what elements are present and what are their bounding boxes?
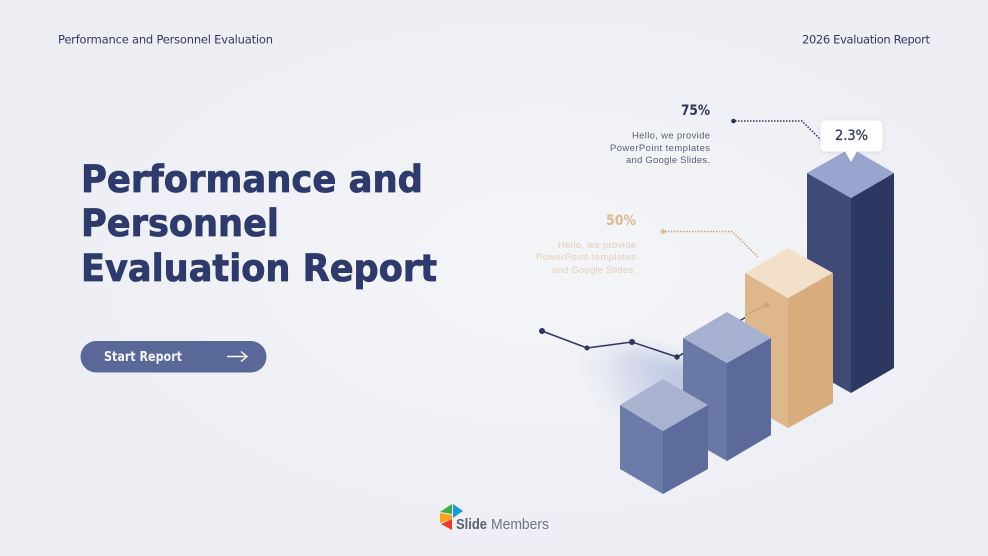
callout: 50% text: Hello, we provide [558,240,636,251]
icon: arrow [227,352,247,362]
shadow glow under line [565,345,700,460]
bar: tall navy [807,148,894,393]
logo: Slide Members: Slide [456,516,487,533]
bar: peach [745,248,833,428]
button: start report: Start Report [104,350,182,365]
bar: medium blue [683,312,771,461]
logo: Slide Members: Members [491,516,549,533]
leader line: 75% [731,119,821,140]
title [81,158,437,290]
icon: logo hexagon [440,504,463,530]
leader line: 50% [661,229,758,257]
title: Performance and [81,158,423,201]
callout: 75% text: PowerPoint templates [610,143,710,154]
callout: 50% text [536,213,636,276]
bar: short blue [620,379,708,494]
header: right label: 2026 Evaluation Report [802,32,930,46]
callout: 50% text: and Google Slides. [552,265,636,276]
callout: 75% text: and Google Slides. [626,155,710,166]
tooltip: 2.3%: 2.3% [835,128,868,144]
callout: 50% text: PowerPoint templates [536,252,636,263]
header: left label: Performance and Personnel Evaluation [58,32,273,46]
button: start report [80,341,266,372]
callout: 75% text: Hello, we provide [632,130,710,142]
faint line seen through peach bar [745,302,770,315]
callout: 75% text: 75% [681,103,710,119]
title: Evaluation Report [81,247,437,290]
logo: Slide Members [440,504,549,533]
callout: 75% text [610,103,710,166]
line chart [539,302,770,360]
callout: 50% text: 50% [606,213,636,229]
title: Personnel [81,202,279,245]
tooltip: 2.3% [820,120,882,162]
